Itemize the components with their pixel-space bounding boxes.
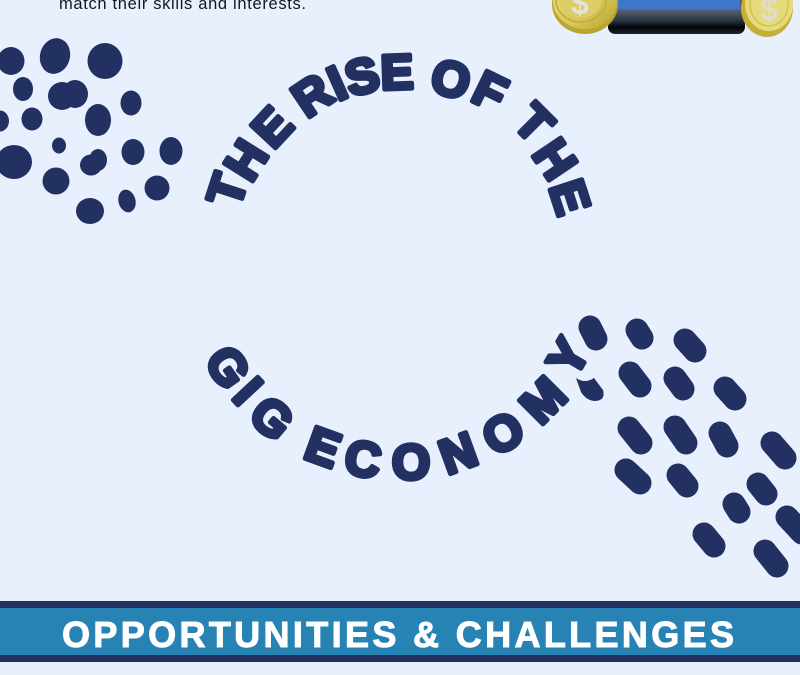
title: GIG ECONOMY [194, 330, 600, 490]
title: THE RISE OF THE: F [464, 61, 515, 123]
title: THE RISE OF THE: E [538, 173, 600, 221]
title: THE RISE OF THE [198, 45, 600, 221]
title: GIG ECONOMY: M [510, 367, 577, 434]
title: GIG ECONOMY: G [239, 386, 303, 452]
title: THE RISE OF THE: S [340, 47, 385, 107]
title: THE RISE OF THE: R [283, 64, 342, 128]
title: THE RISE OF THE: I [320, 56, 355, 111]
decoration: right capsule cluster [576, 327, 800, 566]
title: THE RISE OF THE: T [198, 168, 258, 213]
decoration: left dot cluster [0, 35, 182, 224]
title: GIG ECONOMY: O [392, 436, 430, 490]
icon: wallet with coins [552, 0, 793, 37]
title: GIG ECONOMY: I [223, 368, 272, 415]
title: THE RISE OF THE: T [504, 94, 563, 153]
title: GIG ECONOMY: Y [537, 330, 600, 385]
title: THE RISE OF THE: H [522, 130, 586, 189]
banner: opportunities and challenges [0, 601, 800, 662]
title: THE RISE OF THE: E [380, 45, 414, 101]
title: THE RISE OF THE: H [215, 131, 279, 190]
title: GIG ECONOMY: N [432, 423, 484, 485]
title: GIG ECONOMY: E [298, 417, 347, 479]
banner heading: OPPORTUNITIES & CHALLENGES [62, 614, 734, 655]
title: GIG ECONOMY: G [194, 336, 260, 399]
title: GIG ECONOMY: C [341, 430, 385, 490]
title: THE RISE OF THE: E [242, 97, 304, 158]
title: GIG ECONOMY: O [473, 401, 534, 467]
title: THE RISE OF THE: O [425, 49, 476, 111]
